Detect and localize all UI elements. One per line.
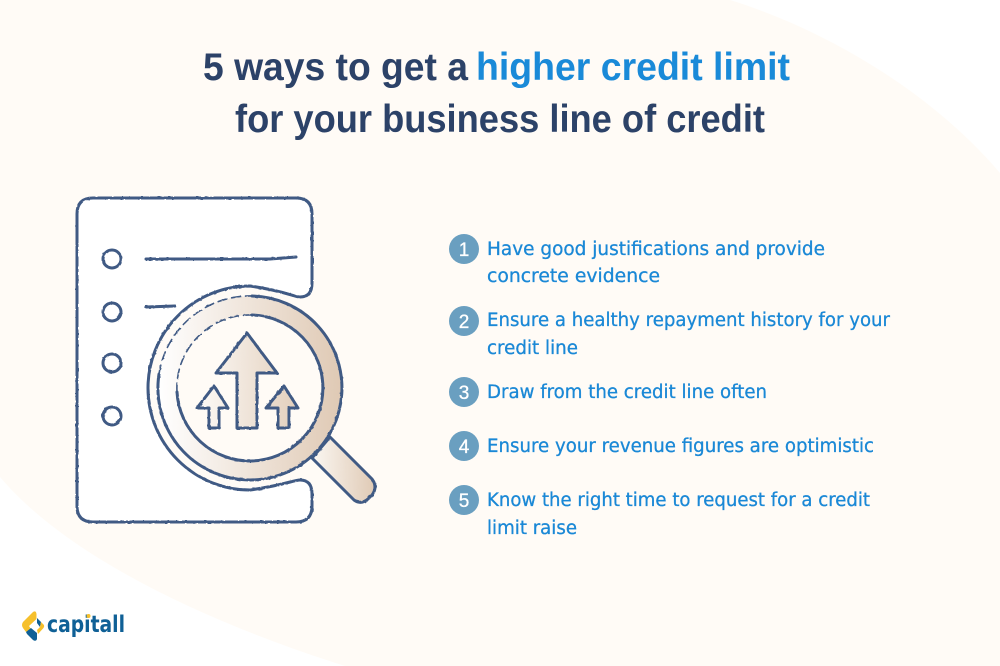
logo i dot <box>86 614 90 618</box>
item 5: 5 <box>459 491 469 512</box>
arrows up <box>197 333 298 428</box>
item 2: 2 <box>459 312 469 333</box>
item 5: limit raise <box>487 518 577 539</box>
item 2: Ensure a healthy repayment history for your <box>487 310 890 331</box>
item 3: Draw from the credit line often <box>487 382 767 403</box>
magnifier ring <box>158 296 342 480</box>
item 2: credit line <box>487 338 578 359</box>
item 1: concrete evidence <box>487 266 660 287</box>
item 5: Know the right time to request for a credit <box>487 490 870 511</box>
logo: capitall <box>22 611 125 641</box>
item 3: 3 <box>459 383 469 404</box>
title: higher credit limit <box>476 46 790 89</box>
item 1: Have good justifications and provide <box>487 239 825 260</box>
magnifier handle <box>312 437 375 502</box>
title: for your business line of credit <box>235 98 765 141</box>
logo mark <box>22 611 44 641</box>
document page <box>77 198 312 522</box>
item 3 <box>449 377 767 407</box>
list bullets <box>103 250 121 425</box>
item 1 <box>449 234 825 287</box>
title: 5 ways to get a <box>203 46 469 89</box>
item 4 <box>449 431 874 461</box>
logo wordmark: capitall <box>47 612 125 638</box>
item 4: Ensure your revenue figures are optimistic <box>487 436 874 457</box>
list of five ways <box>449 234 890 539</box>
illustration: document with magnifying glass <box>77 198 375 522</box>
item 2 <box>449 306 890 359</box>
list lines <box>146 257 296 307</box>
title <box>203 46 790 141</box>
item 5 <box>449 485 870 539</box>
item 1: 1 <box>459 240 469 261</box>
item 4: 4 <box>459 437 470 458</box>
